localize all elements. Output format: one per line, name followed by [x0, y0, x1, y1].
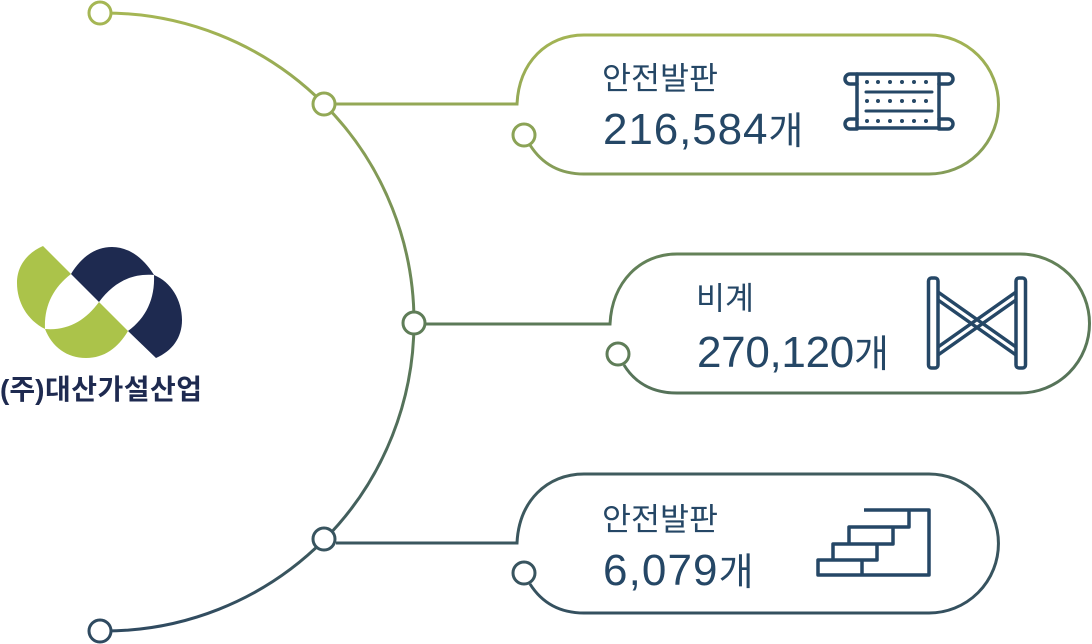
panel: scaffold board	[336, 35, 999, 174]
label: 안전발판	[602, 60, 718, 96]
value: 개	[854, 334, 889, 376]
icon: scaffolding frame	[928, 278, 1026, 368]
label: 안전발판	[602, 501, 718, 537]
value: 개	[768, 111, 803, 153]
logo text: (주)	[0, 374, 44, 405]
pill outline	[426, 254, 1090, 393]
icon: scaffold board	[845, 74, 953, 129]
label: 비계	[696, 280, 754, 316]
logo text: 대산가설산업	[45, 374, 203, 405]
value: 270,120	[697, 328, 854, 377]
pill outline	[336, 35, 999, 174]
main arc with nodes	[105, 13, 414, 631]
panel: stairs	[336, 474, 998, 613]
icon: stairs	[818, 510, 929, 575]
value: 216,584	[603, 105, 768, 154]
pill outline	[336, 474, 998, 613]
value: 개	[719, 552, 754, 594]
panel: scaffolding	[426, 254, 1090, 393]
value: 6,079	[603, 546, 719, 595]
connector nodes	[89, 2, 425, 642]
logo	[0, 246, 203, 405]
